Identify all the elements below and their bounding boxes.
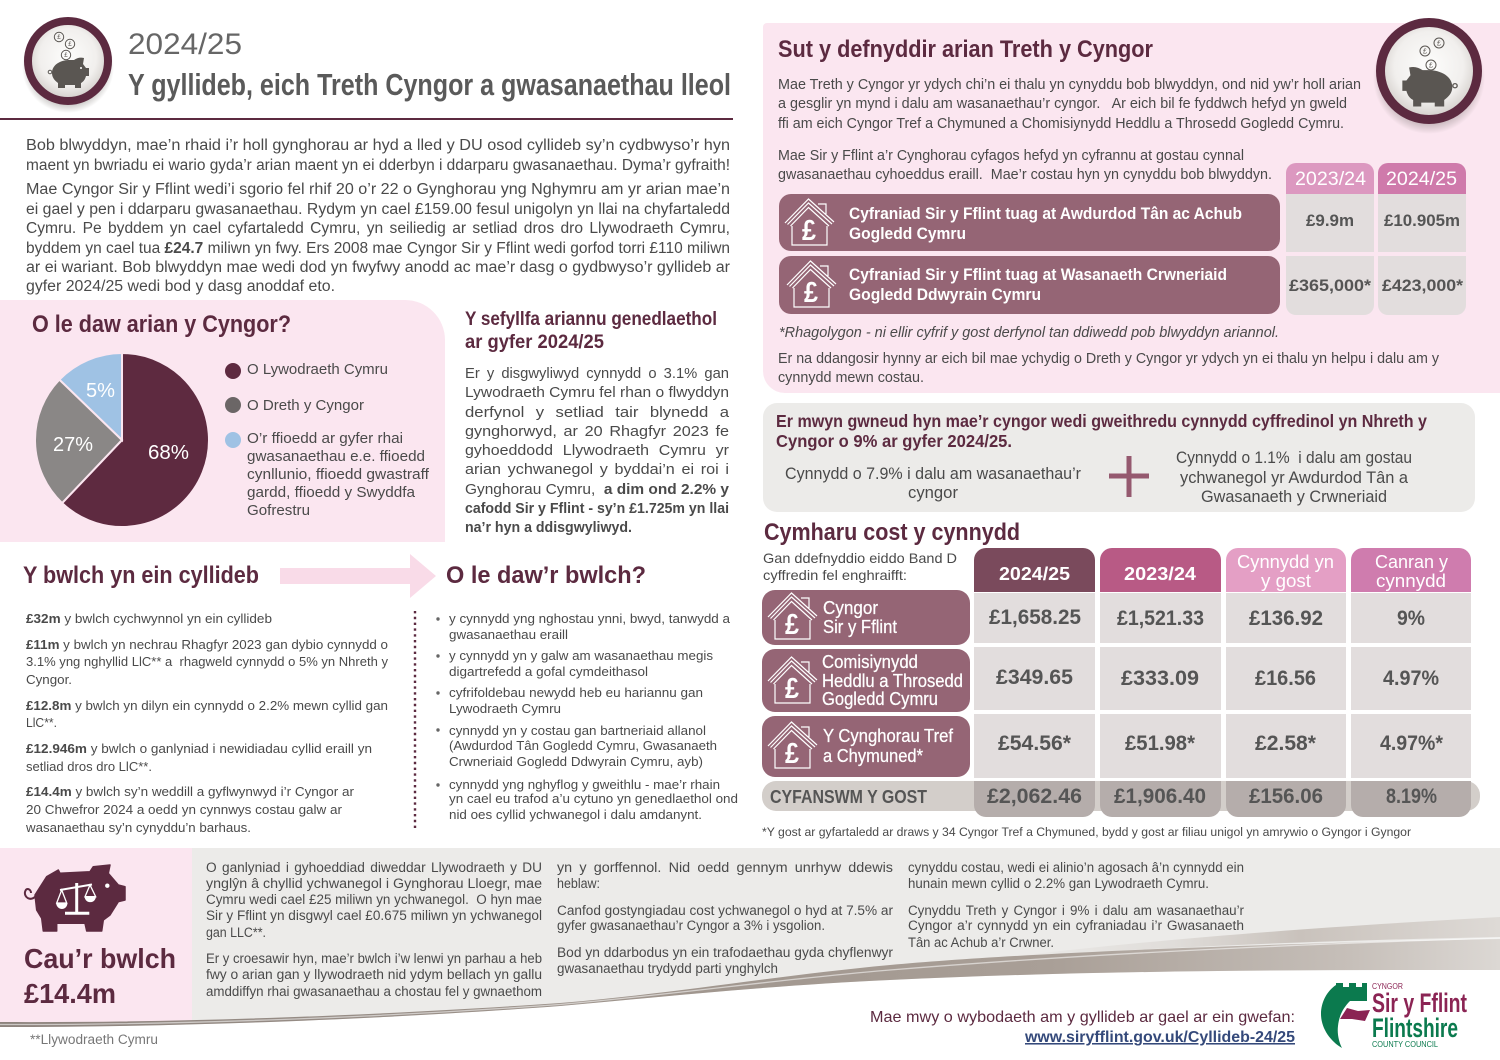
column headers: Canran y [1375,551,1449,572]
table: contributions to other services: £423,000* [1382,276,1463,295]
text block: introduction: Mae Cyngor Sir y Fflint wedi’i sgorio fel rhif 20 o’r 22 o Gynghorau yng Nghymru am yr arian mae’n [26,181,730,198]
text block: introduction: ei gael y pen i ddarparu gwasanaethau. Rydym yn cael £159.00 fesul unigolyn yn llai na chyfartaledd [26,201,730,218]
heading: O le daw arian y Cyngor: O le daw arian y Cyngor? [32,311,291,338]
heading: the gap in our budget: Y bwlch yn ein cyllideb [23,562,259,589]
icon: house with pound: £ [785,609,799,641]
text block: national funding position: Gynghorau Cymru, a dim ond 2.2% y [465,482,730,498]
text block: gap figures: £12.946m y bwlch o ganlyniad i newidiadau cyllid eraill yn [26,741,372,756]
text block: gap figures [25,611,388,835]
text block: closing gap column 1: gan LLC**. [206,925,266,940]
row: coroner service: Cyfraniad Sir y Fflint tuag at Wasanaeth Crwneriaid [849,265,1227,284]
row: total cost: 8.19% [1386,785,1437,808]
text: 7.9 percent: cyngor [908,484,959,502]
icon: piggy bank roundel right: £ [1437,40,1441,48]
text block: closing gap column 2: heblaw: [557,876,600,891]
icon: house with pound [787,261,836,309]
legend [225,362,430,519]
row label: police and crime commissioner [762,649,970,712]
row: coroner service: Gogledd Ddwyrain Cymru [849,285,1041,304]
heading: 9 percent rise: Er mwyn gwneud hyn mae’r cyngor wedi gweithredu cynnydd cyffredinol yn Nhreth y [776,411,1427,431]
text block: gap figures: 20 Chwefror 2024 a oedd yn cynnwys costau galw ar [26,802,343,817]
text block: introduction: Bob blwyddyn, mae’n rhaid i’r holl gynghorau ar hyd a lled y DU osod cyllideb sy’n cydbwyso’r hyn [26,137,730,154]
row values: police and crime commissioner [996,666,1439,690]
text block: closing gap column 3: Cynyddu Treth y Cyngor i 9% i dalu am wasanaethau’r [908,903,1245,918]
text block: introduction: ar ei wariant. Bob blwyddyn mae wedi dod yn fwyfwy anodd ac mae’r dasg o gydbwyso’r gyllideb ar [26,259,730,276]
icon: piggy bank with scales [25,865,125,931]
icon: house with pound: £ [802,215,816,247]
row label: police and crime commissioner: Heddlu a Throsedd [822,671,963,691]
text block: gap figures: £32m y bwlch cychwynnol yn ein cyllideb [26,611,272,626]
arrow [280,554,436,598]
pie chart: income sources: 68% [148,442,189,464]
text block: closing gap column 1: ynglŷn â chyllid ychwanegol i Gynghorau Lloegr, mae [206,876,542,891]
text block: introduction [26,137,730,295]
text: Band D example [763,550,957,583]
row values: county council: £1,521.33 [1117,607,1204,630]
text block: closing gap column 1: fwy o arian gan y llywodraeth nid ydym bellach yn gallu [206,967,542,982]
row values: town and community councils [998,732,1444,755]
text block: closing gap column 2 [557,860,894,976]
icon: piggy bank roundel right: £ [1423,48,1427,56]
list: sources of the gap: digartrefedd a gofal cymdeithasol [449,664,648,679]
legend: Gofrestru [247,503,310,519]
text block: closing gap column 1: Er y croesawir hyn, mae’r bwlch i’w lenwi yn parhau a heb [206,951,542,966]
row label: county council: Cyngor [823,598,878,618]
header icon: piggy bank roundel: £ [68,42,72,48]
row label: county council: Sir y Fflint [823,617,897,637]
list: sources of the gap: cynnydd yng nghyflog y gweithlu - mae’r rhain [449,777,720,792]
header icon: piggy bank roundel [22,21,114,113]
row: fire and rescue authority [779,194,1280,251]
text block: introduction: gyfer 2024/25 wedi bod y dasg anoddaf eto. [26,278,335,295]
table: contributions to other services: 2023/24 [1295,169,1366,190]
icon: house with pound: £ [785,738,799,770]
text block: closing note: cynnydd mewn costau. [778,370,924,386]
legend: O Lywodraeth Cymru [247,362,388,378]
row values: police and crime commissioner: £333.09 [1121,667,1199,690]
heading: national funding position: Y sefyllfa ariannu genedlaethol [465,309,717,330]
text block: national funding position: gyhoeddodd Llywodraeth Cymru yr [465,443,729,459]
legend: cynllunio, ffioedd gwastraff [247,467,430,483]
heading: 9 percent rise [776,411,1427,451]
text block: gap figures: £14.4m y bwlch sy’n weddill a gyflwynwyd i’r Cyngor ar [26,784,355,799]
text block: closing gap column 1: amddiffyn rhai gwasanaethau a chostau fel y gwnaethom [206,984,542,999]
heading: compare the cost of the increase: Cymharu cost y cynnydd [764,519,1020,546]
text block: gap figures: £12.8m y bwlch yn dilyn ein cynnydd o 2.2% mewn cyllid gan [26,698,388,713]
panel: how council tax money is used [763,22,1500,393]
logo: Flintshire County Council [1321,982,1467,1049]
text block: council tax introduction: ffi am eich Cyngor Tref a Chymuned a Chomisiynydd Heddlu a Throsedd Gogledd Cymru. [778,116,1344,132]
legend: gardd, ffioedd y Swyddfa [247,485,416,501]
text block: introduction: maent yn bwriadu ei wario gyda’r arian maent yn ei dderbyn i ddarparu gwasanaethau. Dyma’r gyfraith! [26,157,730,174]
row: coroner service [779,256,1280,314]
table: cost comparison [762,548,1480,817]
list: sources of the gap [436,611,738,822]
heading: year: 2024/25 [128,28,242,61]
text: Band D example: cyffredin fel enghraifft: [763,567,907,583]
logo: Flintshire County Council: CYNGOR [1372,982,1403,991]
row values: county council: £1,658.25 [989,606,1081,629]
text block: closing gap column 1 [206,860,542,999]
row label: police and crime commissioner: Gogledd Cymru [822,689,938,709]
heading: where does the gap come from: O le daw’r bwlch? [446,562,646,589]
text block: national funding position [465,366,730,536]
heading: closing the gap: Cau’r bwlch [24,943,176,974]
text: 1.1 percent: Cynnydd o 1.1% i dalu am gostau [1176,449,1412,467]
legend: O’r ffioedd ar gyfer rhai [247,431,403,447]
text block: closing gap column 3: Cyngor a’r cynnydd yn ein cyfraniadau i’r Gwasanaeth [908,918,1244,933]
icon: house with pound [768,722,817,770]
text block: closing gap column 3: Tân ac Achub a’r Crwner. [908,935,1054,950]
heading: Sut y defnyddir arian: Sut y defnyddir arian Treth y Cyngor [778,36,1153,63]
table: contributions to other services: £9.9m [1306,211,1354,230]
header icon: piggy bank roundel: £ [64,53,68,59]
footnote: average cost: *Y gost ar gyfartaledd ar draws y 34 Cyngor Tref a Chymuned, bydd y gost ar filiau unigol yn amrywio o Gyngor i Gyngor [762,825,1411,839]
table: contributions to other services [779,163,1466,315]
icon: piggy bank roundel right: £ [1429,62,1433,70]
table: contributions to other services: 2024/25 [1386,169,1457,190]
text block: national funding position: arian ychwanegol y byddai’n ei roi i [465,462,729,478]
column headers: 2023/24 [1124,563,1197,584]
list: sources of the gap: Crwneriaid Gogledd Ddwyrain Cymru, ayb) [449,754,703,769]
list: sources of the gap: cyfrifoldebau newydd heb eu hariannu gan [449,685,703,700]
value cells [974,593,1471,778]
row values: town and community councils: 4.97%* [1380,732,1444,755]
list: sources of the gap: nid oes cyllid ychwanegol i dalu amdanynt. [449,807,702,822]
row label: town and community councils [762,716,970,777]
logo: Flintshire County Council: Flintshire [1372,1013,1458,1043]
text block: national funding position: gynghorwyd, ar 20 Rhagfyr 2023 fe [465,424,729,440]
text block: closing gap column 3: cynyddu costau, wedi ei alinio’n agosach â’n cynnydd ein [908,860,1244,875]
column headers: cynnydd [1376,570,1446,591]
text: 7.9 percent [785,465,1081,502]
heading: national funding position [465,309,717,353]
row: total cost [770,785,1437,808]
row label: town and community councils: Y Cynghorau Tref [823,726,954,746]
text block: gap figures: LlC**. [26,715,57,730]
column headers: Cynnydd yn [1237,551,1334,572]
icon: house with pound: £ [804,277,818,309]
footnote: Welsh Government: **Llywodraeth Cymru [30,1032,158,1047]
list: sources of the gap: y cynnydd yng nghostau ynni, bwyd, tanwydd a [449,611,731,626]
text block: closing gap column 3 [908,860,1245,950]
text: 1.1 percent: ychwanegol yr Awdurdod Tân a [1180,469,1409,487]
list: sources of the gap: Lywodraeth Cymru [449,701,561,716]
row: total cost: £1,906.40 [1114,785,1206,808]
row values: town and community councils: £2.58* [1255,732,1317,755]
header icon: piggy bank roundel: £ [57,35,61,41]
row values: police and crime commissioner: £16.56 [1255,667,1316,690]
text block: council tax introduction: Mae Sir y Fflint a’r Cynghorau cyfagos hefyd yn cyfrannu at gostau cynnal [778,148,1244,164]
legend: gwasanaethau e.e. ffioedd [247,449,425,465]
text block: closing gap column 2: gyfer gwasanaethau’r Cyngor a 3% i ysgolion. [557,918,825,933]
text: 1.1 percent [1176,449,1412,506]
text block: closing gap column 2: Bod yn ddarbodus yn ein trafodaethau gyda chyflenwyr [557,945,894,960]
text block: closing gap column 2: yn y gorffennol. Nid oedd gennym unrhyw ddewis [557,860,893,875]
row values: town and community councils: £54.56* [998,732,1072,755]
heading: 9 percent rise: Cyngor o 9% ar gyfer 2024/25. [776,431,1012,451]
title: Y gyllideb, eich Treth Cyngor a gwasanaethau lleol [128,67,731,102]
row: total cost: £156.06 [1249,785,1323,808]
icon: house with pound [768,593,817,641]
text: 1.1 percent: Gwasanaeth y Crwneriaid [1201,488,1387,506]
text block: gap figures: 3.1% yng nghyllid LlC** a rhagweld cynnydd o 5% yn Nhreth y [26,654,388,669]
text block: gap figures: £11m y bwlch yn nechrau Rhagfyr 2023 gan dybio cynnydd o [26,637,388,652]
text block: council tax introduction: gwasanaethau cyhoeddus eraill. Mae’r costau hyn yn cynyddu bob blwyddyn. [778,167,1272,183]
table: contributions to other services: £10.905m [1384,211,1460,230]
text block: closing note [778,351,1440,386]
pie chart: income sources: 5% [86,380,115,402]
text block: gap figures: wasanaethau sy’n cynyddu’n barhaus. [25,820,251,835]
list: sources of the gap: gwasanaethau eraill [449,627,568,642]
row label: police and crime commissioner: Comisiynydd [822,652,918,672]
row: total cost: £2,062.46 [987,785,1082,808]
total row background [762,781,1480,817]
text block: closing gap column 2: gwasanaethau trydydd parti ynghylch [557,961,778,976]
logo: Flintshire County Council: COUNTY COUNCIL [1372,1040,1439,1049]
text block: national funding position: derfynol y setliad tair blynedd a [465,405,730,421]
text: Band D example: Gan ddefnyddio eiddo Band D [763,550,957,566]
table: contributions to other services: £365,000* [1289,276,1371,295]
text: 7.9 percent: Cynnydd o 7.9% i dalu am wasanaethau’r [785,465,1081,483]
text block: closing gap column 3: hunain mewn cyllid o 2.2% gan Lywodraeth Cymru. [908,876,1209,891]
text block: national funding position: na’r hyn a ddisgwyliwyd. [465,520,632,536]
panel: general council tax increase [763,403,1475,512]
text block: council tax introduction [778,77,1361,183]
column headers: 2024/25 [999,563,1070,584]
heading: national funding position: ar gyfer 2024/25 [465,332,604,353]
row label: town and community councils: a Chymuned* [823,746,923,766]
text block: closing gap column 2: Canfod gostyngiadau cost ychwanegol o hyd at 7.5% ar [557,903,894,918]
icon: plus sign [1109,456,1149,497]
list: sources of the gap: cynnydd yn y costau gan bartneriaid allanol [449,723,706,738]
heading: closing the gap: £14.4m [24,978,116,1009]
text block: council tax introduction: a gesglir yn mynd i dalu am wasanaethau’r cyngor. Ar eich bil fe fyddwch hefyd yn gweld [778,96,1347,112]
text block: introduction: byddem yn cael tua £24.7 miliwn yn fwy. Ers 2008 mae Cyngor Sir y Fflint wedi gorfod torri £110 miliwn [26,240,730,257]
list: sources of the gap: yn cael eu trafod a’u cytuno yn genedlaethol ond [449,791,738,806]
row values: police and crime commissioner: 4.97% [1383,667,1439,690]
row values: town and community councils: £51.98* [1125,732,1196,755]
row values: county council: 9% [1397,607,1425,630]
icon: house with pound: £ [785,673,799,705]
text block: closing note: Er na ddangosir hynny ar eich bil mae ychydig o Dreth y Cyngor yr ydych yn ei thalu yn helpu i dalu am y [778,351,1440,367]
text block: national funding position: cafodd Sir y Fflint - sy’n £1.725m yn llai [465,501,729,517]
icon: house with pound [768,657,817,705]
row: fire and rescue authority: Cyfraniad Sir y Fflint tuag at Awdurdod Tân ac Achub [849,204,1242,223]
row: fire and rescue authority: Gogledd Cymru [849,224,966,243]
note: forecast: *Rhagolygon - ni ellir cyfrif y gost derfynol tan ddiwedd pob blwyddyn ariannol. [779,325,1279,341]
text: more information: Mae mwy o wybodaeth am y gyllideb ar gael ar ein gwefan: [870,1009,1295,1026]
text block: introduction: Cymru. Pe byddem yn cael cyfartaledd Cymru, yn seiliedig ar setliad dros dro Llywodraeth Cymru, [26,220,730,237]
icon: house with pound [785,199,834,247]
text block: gap figures: Cyngor. [26,672,72,687]
text block: gap figures: setliad dros dro LlC**. [26,759,152,774]
text block: national funding position: Lywodraeth Cymru fel rhan o flwyddyn [465,385,729,401]
text block: closing gap column 1: Sir y Fflint yn disgwyl cael £0.675 miliwn yn ychwanegol [206,908,542,923]
heading: closing the gap [24,943,176,1009]
panel: closing the gap background [0,848,1500,1027]
text block: closing gap column 1: O ganlyniad i gyhoeddiad diweddar Llywodraeth y DU [206,860,542,875]
pie chart: income sources [35,353,209,527]
icon: piggy bank roundel right [1373,22,1485,134]
row values: county council: £136.92 [1249,607,1323,630]
legend: O Dreth y Cyngor [247,398,364,414]
text block: national funding position: Er y disgwyliwyd cynnydd o 3.1% gan [465,366,729,382]
row values: county council [989,606,1425,630]
row values: police and crime commissioner: £349.65 [996,666,1073,689]
list: sources of the gap: y cynnydd yn y galw am wasanaethau megis [449,648,713,663]
text block: closing gap column 1: Cymru wedi cael £25 miliwn yn ychwanegol. O hyn mae [206,892,542,907]
row: total cost: CYFANSWM Y GOST [770,787,927,807]
panel: where the money comes from [0,300,445,542]
column headers: y gost [1261,570,1311,591]
pie chart: income sources: 27% [53,434,93,456]
column headers [974,548,1471,592]
link: website: www.siryfflint.gov.uk/Cyllideb-24/25 [1024,1029,1295,1046]
text block: council tax introduction: Mae Treth y Cyngor yr ydych chi’n ei thalu yn cynyddu bob blwyddyn, ond nid yw’r holl arian [778,77,1361,93]
list: sources of the gap: (Awdurdod Tân Gogledd Cymru, Gwasanaeth [449,738,717,753]
row label: county council [762,590,970,645]
